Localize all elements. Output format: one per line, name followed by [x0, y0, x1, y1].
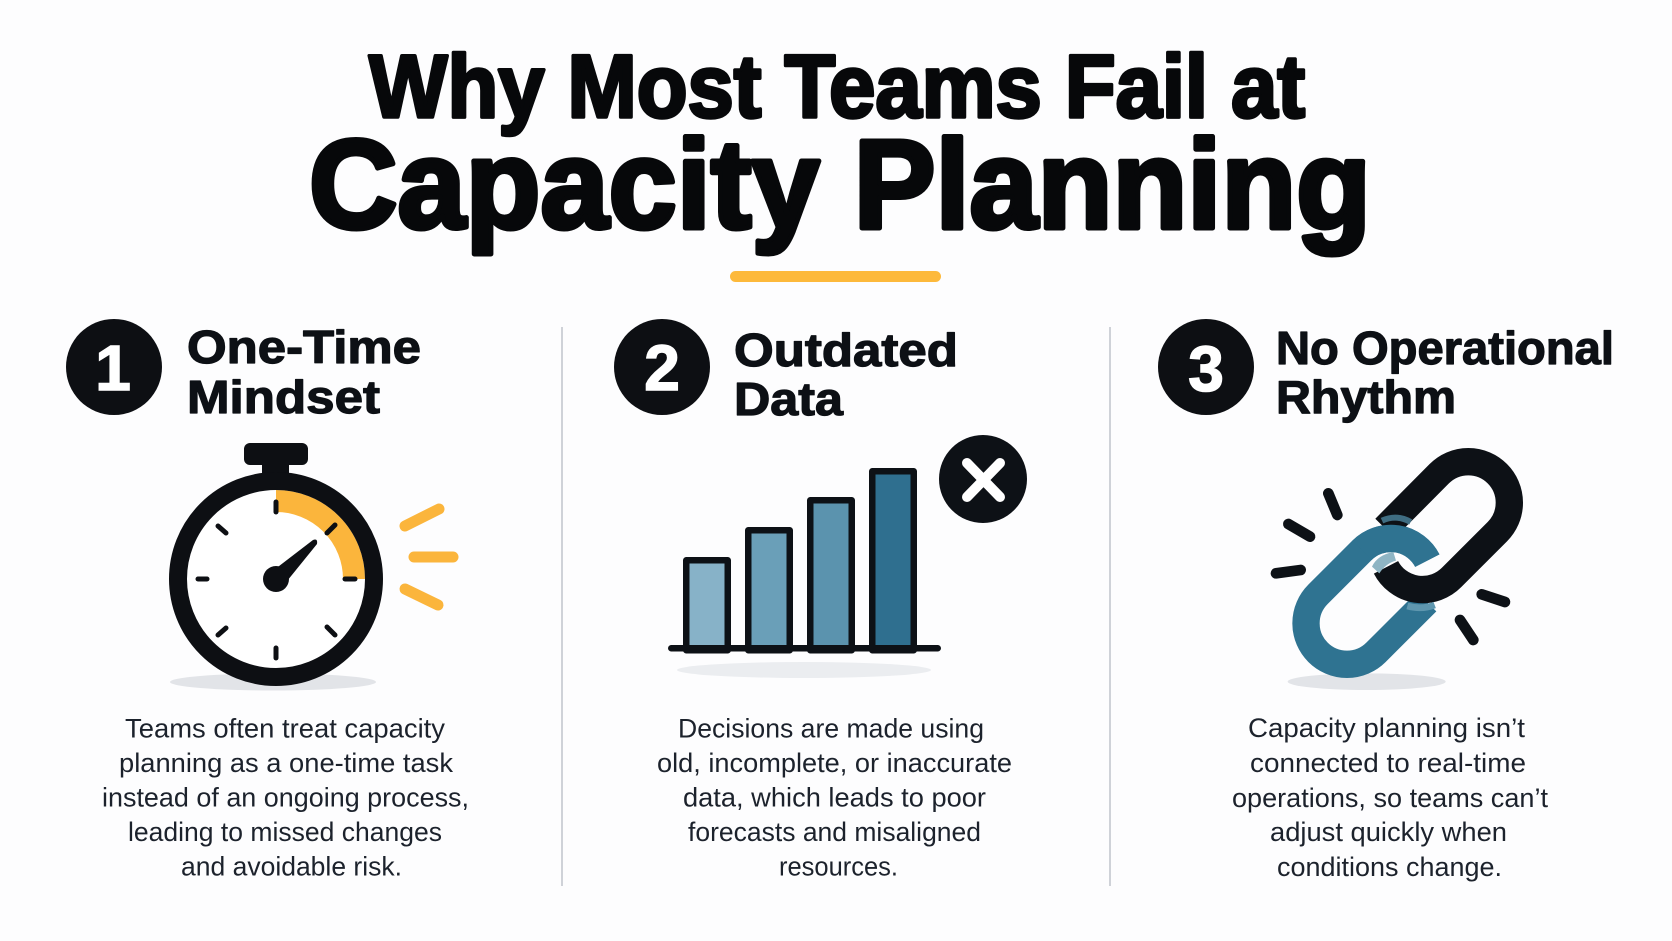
- number badge 2: 2: [644, 332, 680, 404]
- description 1: instead of an ongoing process,: [102, 782, 469, 812]
- heading: No Operational Rhythm: [1276, 322, 1614, 423]
- number badge 1: 1: [95, 332, 131, 404]
- heading: One-Time Mindset: One-Time: [187, 321, 421, 373]
- heading: Outdated Data: Data: [734, 373, 843, 425]
- title underline: [730, 271, 941, 282]
- description 2: Decisions are made using: [678, 714, 984, 744]
- description 1: planning as a one-time task: [119, 748, 454, 778]
- description 2: data, which leads to poor: [683, 782, 986, 812]
- description 1: [102, 714, 469, 882]
- description 2: [657, 714, 1012, 882]
- heading: Outdated Data: Outdated: [734, 324, 958, 376]
- icon: bar chart with x: [668, 435, 1027, 678]
- description 2: old, incomplete, or inaccurate: [657, 748, 1012, 778]
- description 3: adjust quickly when: [1270, 817, 1507, 847]
- heading: No Operational Rhythm: No Operational: [1276, 322, 1614, 374]
- heading: No Operational Rhythm: Rhythm: [1276, 371, 1456, 423]
- panel: one-time mindset: [66, 319, 469, 882]
- panel: no operational rhythm: [1158, 319, 1614, 882]
- column dividers: [561, 327, 1111, 886]
- number badge 3: [1158, 319, 1254, 415]
- description 2: forecasts and misaligned: [688, 817, 981, 847]
- description 3: operations, so teams can’t: [1232, 783, 1549, 813]
- heading: Outdated Data: [734, 324, 958, 425]
- description 3: connected to real-time: [1250, 748, 1526, 778]
- description 1: Teams often treat capacity: [125, 714, 446, 744]
- heading: One-Time Mindset: Mindset: [187, 371, 380, 423]
- number badge 1: [66, 319, 162, 415]
- description 3: [1232, 713, 1549, 882]
- number badge 3: 3: [1188, 333, 1224, 405]
- description 2: resources.: [779, 852, 898, 882]
- number badge 2: [614, 319, 710, 415]
- description 3: Capacity planning isn’t: [1248, 713, 1526, 743]
- icon: stopwatch: [170, 443, 453, 690]
- description 1: leading to missed changes: [128, 817, 442, 847]
- heading: One-Time Mindset: [187, 321, 421, 423]
- title: Why Most Teams Fail at: [369, 36, 1305, 136]
- icon: broken chain link: [1276, 462, 1509, 690]
- description 3: conditions change.: [1277, 852, 1502, 882]
- panel: outdated data: [614, 319, 1027, 882]
- title: [309, 36, 1371, 255]
- title: Capacity Planning: [309, 114, 1371, 255]
- description 1: and avoidable risk.: [181, 852, 402, 882]
